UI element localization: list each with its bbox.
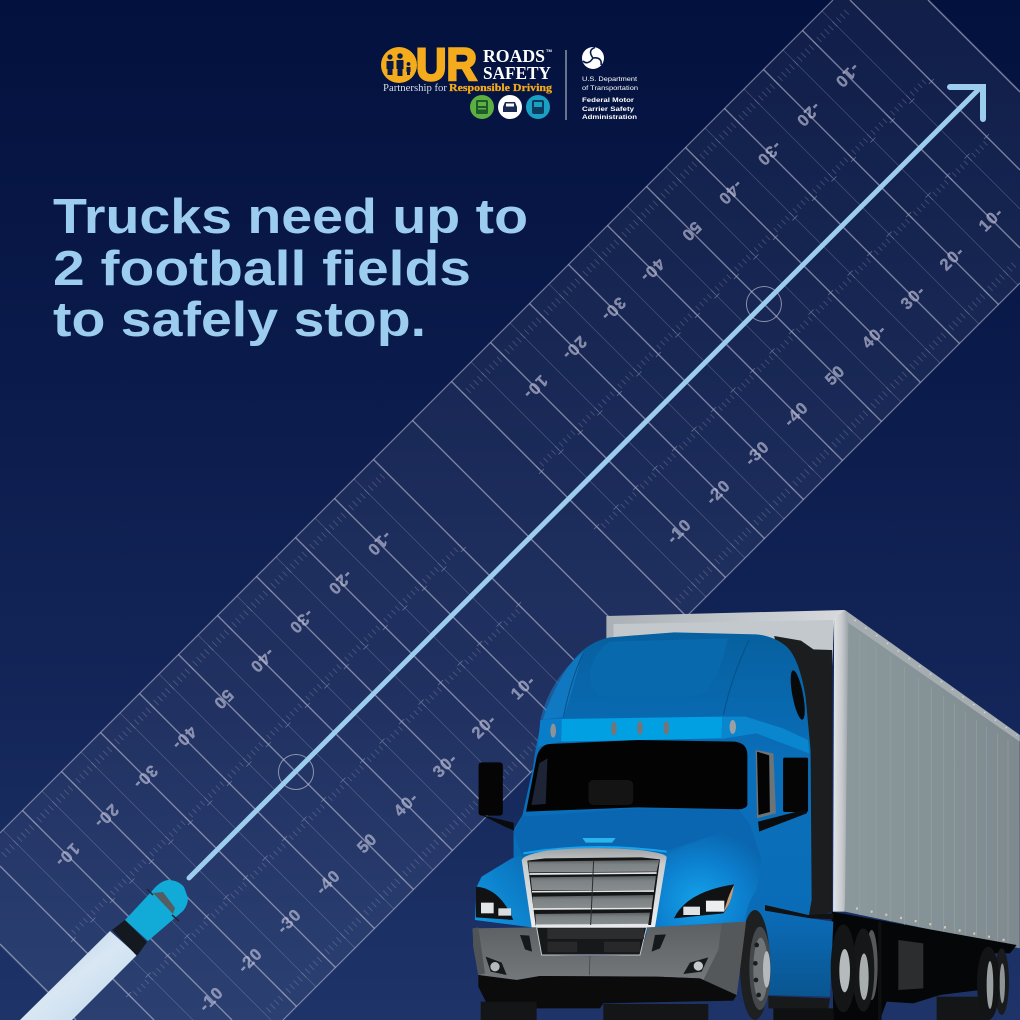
right mirror (758, 758, 808, 832)
fog lamp brackets (520, 934, 666, 952)
lower yard numbers: -20 (703, 477, 734, 508)
agency text: of Transportation (582, 85, 638, 92)
logo wordmark Roads Safety (483, 46, 552, 83)
upper yard numbers: -30 (285, 605, 317, 637)
trailer rivets (856, 908, 1017, 943)
step (768, 996, 830, 1009)
logo wordmark OUR (381, 39, 477, 90)
lower yard numbers: 50 (354, 830, 381, 857)
lower yard numbers: 30- (430, 750, 461, 781)
agency text: U.S. Department (582, 76, 637, 83)
cab rear fairing (774, 636, 832, 920)
heading (53, 189, 528, 347)
upper yard numbers: 10- (519, 371, 551, 403)
logo icon: family (386, 53, 410, 76)
upper yard numbers: -20 (324, 566, 356, 598)
truck rear chassis and wheels (740, 905, 1017, 1020)
agency text: Federal Motor (582, 97, 634, 104)
icon: white car badge (498, 95, 522, 119)
door lower panel (765, 912, 833, 997)
bumper (473, 922, 746, 995)
upper yard numbers: 40- (168, 722, 200, 754)
logo wordmark Roads Safety: ROADS (483, 46, 545, 66)
lower yard numbers (196, 204, 1007, 1015)
upper yard numbers: 20- (558, 332, 590, 364)
drive wheels (831, 922, 882, 1020)
lower yard numbers: -10 (664, 516, 695, 547)
chassis underside (832, 912, 1017, 1020)
lower yard numbers: -40 (781, 399, 812, 430)
lower tread (773, 1008, 833, 1020)
lower grille (537, 927, 647, 975)
upper yard numbers: -40 (714, 176, 746, 208)
top-down truck icon (20, 880, 188, 1020)
upper yard numbers: 50 (678, 218, 705, 245)
upper yard numbers: -10 (831, 59, 863, 91)
grille highlight (523, 847, 667, 853)
lower yard numbers: 10- (508, 672, 539, 703)
logo tagline: Partnership for (383, 83, 448, 94)
logo tagline (383, 83, 552, 94)
lower yard numbers: -10 (196, 984, 227, 1015)
icon: green truck badge (470, 95, 494, 119)
truck upper body (479, 610, 1020, 948)
upper yard numbers: 20- (90, 800, 122, 832)
logo: US DOT FMCSA (582, 47, 638, 121)
hood (514, 808, 749, 857)
left headlight (476, 887, 513, 920)
visor band (538, 717, 809, 753)
upper yard numbers: -30 (753, 137, 785, 169)
trailer wheel tread (937, 997, 987, 1020)
truck front (473, 823, 762, 1020)
center circle, field one (271, 747, 321, 797)
left fender (475, 855, 532, 927)
semi truck illustration (473, 610, 1020, 1020)
agency text: Carrier Safety (582, 106, 634, 113)
lower yard numbers: -30 (274, 906, 305, 937)
lower bumper skirt (478, 975, 737, 1008)
lower yard numbers: 40- (859, 321, 890, 352)
cab sill (765, 905, 833, 919)
hash ticks, field two (464, 4, 1020, 605)
trailer front panel (606, 610, 845, 667)
lower yard numbers: 30- (898, 282, 929, 313)
windshield (526, 740, 747, 812)
upper yard numbers: -10 (363, 527, 395, 559)
upper yard numbers: 30- (129, 761, 161, 793)
hash ticks, field one (0, 472, 596, 1020)
logo: Our Roads Our Safety (381, 39, 552, 119)
logo divider (565, 50, 567, 120)
agency text: Administration (582, 114, 637, 121)
cab roof highlight (540, 652, 583, 720)
trailer side (833, 610, 1020, 948)
logo wordmark Roads Safety: SAFETY (483, 63, 551, 83)
trailer wheels (977, 947, 1009, 1020)
logo tagline: Responsible Driving (449, 83, 552, 94)
upper yard numbers: -20 (792, 98, 824, 130)
lower yard numbers: 10- (975, 204, 1007, 235)
fog lamps (486, 957, 708, 975)
arrow: stopping distance (189, 87, 983, 878)
lower yard numbers: 20- (469, 711, 500, 742)
logo wordmark OUR: UR (416, 39, 477, 90)
roof seams (564, 640, 749, 717)
hood badge light (582, 838, 616, 843)
front tires (481, 1002, 708, 1020)
upper yard numbers: 40- (636, 254, 668, 286)
side window (756, 750, 776, 818)
cab body (514, 632, 812, 933)
icon: teal bus badge (526, 95, 550, 119)
sleeper vent (788, 670, 808, 720)
heading: 2 football fields (53, 241, 471, 296)
lower yard numbers: -30 (742, 438, 773, 469)
center circle, field two (739, 279, 789, 329)
roof fairing recess (590, 638, 728, 697)
heading: Trucks need up to (53, 189, 528, 244)
lower yard numbers: 50 (822, 362, 849, 389)
grille (522, 848, 667, 927)
fuel box (898, 940, 923, 990)
right headlight (674, 884, 734, 918)
lower yard numbers: 40- (391, 789, 422, 820)
logo wordmark Roads Safety: TM (546, 48, 552, 53)
upper yard numbers: 50 (210, 686, 237, 713)
lower yard numbers: 20- (937, 243, 968, 274)
icon: DOT emblem (582, 47, 604, 69)
heading: to safely stop. (53, 292, 426, 347)
left mirror (479, 762, 514, 831)
agency text (582, 76, 638, 121)
upper yard numbers: -40 (246, 644, 278, 676)
upper yard numbers: 10- (51, 839, 83, 871)
cab vent (718, 824, 748, 843)
front wheel (740, 910, 771, 1020)
lower yard numbers: -20 (235, 945, 266, 976)
upper yard numbers (51, 59, 863, 871)
right fender (648, 823, 762, 927)
lower yard numbers: -40 (313, 867, 344, 898)
upper yard numbers: 30- (597, 293, 629, 325)
